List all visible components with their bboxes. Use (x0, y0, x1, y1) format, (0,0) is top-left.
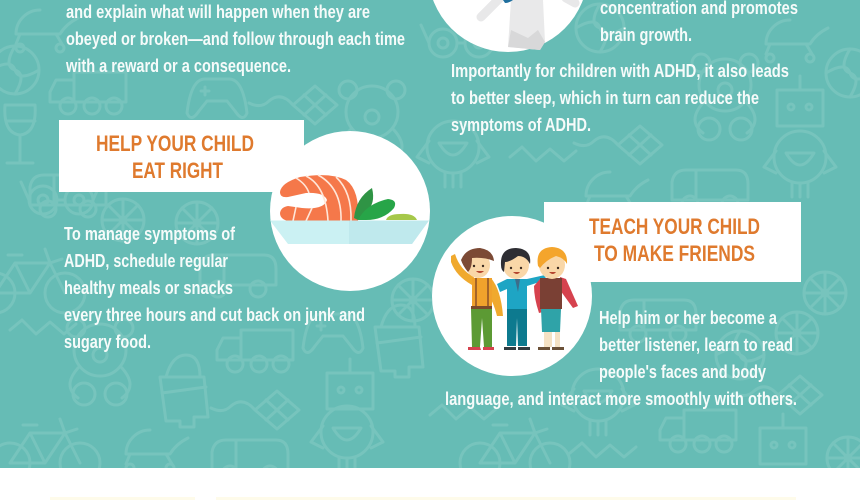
text block: exercise benefit: Importantly for children with ADHD, it also leads (451, 61, 789, 81)
illustration: doctor circle (428, 0, 588, 52)
text block: make friends advice: better listener, learn to read (599, 335, 793, 355)
panel: teach your child to make friends heading: TEACH YOUR CHILD (589, 214, 760, 239)
panel: teach your child to make friends heading: TO MAKE FRIENDS (594, 241, 755, 266)
text block: eat right advice: sugary food. (64, 332, 151, 352)
text block: rules and follow through: and explain what will happen when they are (66, 2, 370, 22)
text block: eat right advice (64, 224, 365, 352)
left boy (451, 248, 503, 350)
illustration: three friends circle (432, 216, 592, 376)
text block: rules and follow through: obeyed or broken—and follow through each time (66, 29, 405, 49)
text block: exercise benefit (451, 0, 798, 135)
text block: eat right advice: every three hours and cut back on junk and (64, 305, 365, 325)
text block: rules and follow through (65, 2, 405, 76)
text block: make friends advice: Help him or her become a (599, 308, 778, 328)
text block: make friends advice (445, 308, 797, 409)
text block: eat right advice: To manage symptoms of (64, 224, 236, 244)
text block: eat right advice: ADHD, schedule regular (64, 251, 228, 271)
middle boy (497, 248, 546, 350)
text block: exercise benefit: symptoms of ADHD. (451, 115, 591, 135)
right boy (534, 247, 578, 350)
panel: teach your child to make friends heading (544, 202, 801, 282)
text block: rules and follow through: with a reward or a consequence. (65, 56, 291, 76)
text block: exercise benefit: brain growth. (600, 25, 692, 45)
illustration: salmon plate circle (270, 131, 430, 291)
text block: make friends advice: people's faces and body (599, 362, 766, 382)
text block: eat right advice: healthy meals or snacks (64, 278, 233, 298)
bottom white band (0, 468, 860, 500)
panel: help your child eat right heading: HELP YOUR CHILD (96, 131, 254, 156)
panel: help your child eat right heading (59, 120, 304, 192)
text block: exercise benefit: to better sleep, which in turn can reduce the (451, 88, 759, 108)
panel: help your child eat right heading: EAT RIGHT (132, 158, 223, 183)
